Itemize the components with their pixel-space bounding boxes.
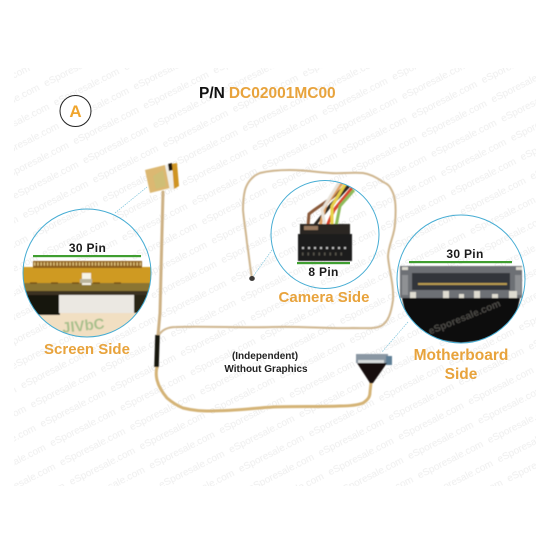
green pin marker (297, 262, 350, 264)
note: independent without graphics: Without Graphics (224, 364, 308, 375)
motherboard connector on cable (356, 354, 392, 383)
camera module (249, 276, 255, 281)
photo: camera connector (298, 181, 354, 261)
flat cable (156, 170, 396, 411)
panel: motherboard side: Side (445, 366, 478, 383)
green pin marker (409, 261, 512, 263)
photo: motherboard connector: eSporesale.com (427, 298, 503, 337)
label: Camera Side (279, 289, 369, 306)
label: Motherboard (414, 347, 508, 364)
screen connector on cable (145, 163, 179, 193)
pin count: 30 Pin (69, 241, 106, 255)
note: independent without graphics (224, 351, 308, 375)
infographic canvas (14, 68, 536, 486)
lower cable to motherboard connector (156, 367, 371, 411)
camera branch cable (159, 170, 396, 335)
panel: motherboard side (397, 215, 525, 383)
circle border (23, 209, 151, 337)
dashed leader lines (115, 187, 408, 352)
circle border (271, 180, 379, 288)
watermark pattern (14, 68, 536, 486)
pin count: 30 Pin (446, 247, 484, 261)
black sleeve (156, 335, 158, 367)
badge: A (60, 96, 91, 126)
panel: camera side (271, 180, 379, 306)
title: part number: P/N DC02001MC00 (199, 85, 336, 102)
green pin marker (33, 255, 141, 257)
note: independent without graphics: (Independent) (232, 351, 298, 362)
badge: A: A (69, 102, 82, 121)
circle border (397, 215, 525, 343)
label: Screen Side (44, 341, 130, 358)
photo: screen connector (24, 260, 150, 336)
main cable: screen connector to black sleeve (158, 192, 163, 335)
photo: screen connector: JIVbC (61, 316, 106, 337)
pin count: 8 Pin (308, 265, 339, 279)
photo: motherboard connector (400, 266, 522, 343)
panel: screen side (20, 209, 155, 358)
